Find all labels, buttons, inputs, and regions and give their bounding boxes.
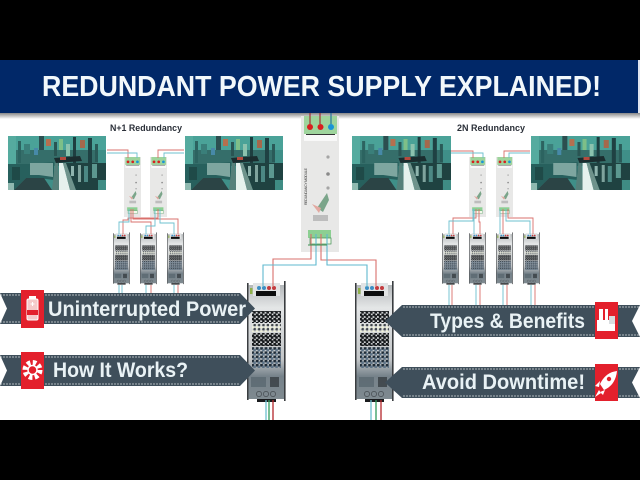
small module 2N B — [496, 157, 513, 217]
central wiring — [263, 113, 376, 287]
small module 2N A — [469, 157, 486, 217]
central redundancy module — [301, 116, 339, 252]
small PSU N+1 3 — [167, 232, 184, 285]
large PSU right — [355, 281, 394, 402]
label text: Avoid Downtime! — [422, 371, 585, 394]
icon: battery — [21, 290, 44, 328]
bottom black band — [0, 420, 640, 480]
small PSU 2N 3 — [496, 232, 513, 285]
label text: Types & Benefits — [430, 310, 585, 333]
factory image 3 — [352, 136, 451, 190]
heading: 2N: 2N Redundancy — [457, 123, 525, 133]
small PSU 2N 4 — [523, 232, 540, 285]
small PSU N+1 2 — [140, 232, 157, 285]
ribbon: Avoid Downtime — [385, 364, 640, 401]
banner shadow — [0, 113, 640, 119]
title banner — [0, 60, 640, 113]
icon: gear — [21, 352, 44, 389]
heading: N+1: N+1 Redundancy — [110, 123, 182, 133]
factory image 4 — [531, 136, 630, 190]
top black band — [0, 0, 640, 60]
large PSU left — [247, 281, 286, 402]
output wires left — [266, 400, 273, 420]
output wires right — [371, 400, 381, 420]
small PSU 2N 1 — [442, 232, 459, 285]
factory image 2 — [185, 136, 283, 190]
label text: Uninterrupted Power — [48, 298, 246, 321]
2N wiring — [449, 151, 535, 305]
title text: REDUNDANT POWER SUPPLY EXPLAINED! — [42, 71, 601, 103]
factory image 1 — [8, 136, 106, 190]
N+1 wiring — [107, 150, 184, 293]
small PSU N+1 1 — [113, 232, 130, 285]
ribbon: How It Works — [0, 352, 255, 389]
icon: factory — [595, 302, 618, 339]
small module N+1 B — [150, 157, 167, 217]
label text: How It Works? — [53, 359, 188, 382]
module vertical label: REDUNDANCY MODULE — [304, 167, 308, 205]
small module N+1 A — [124, 157, 141, 217]
ribbon: Types & Benefits — [385, 302, 640, 339]
icon: rocket — [595, 364, 618, 401]
ribbon: Uninterrupted Power — [0, 290, 255, 328]
small PSU 2N 2 — [469, 232, 486, 285]
